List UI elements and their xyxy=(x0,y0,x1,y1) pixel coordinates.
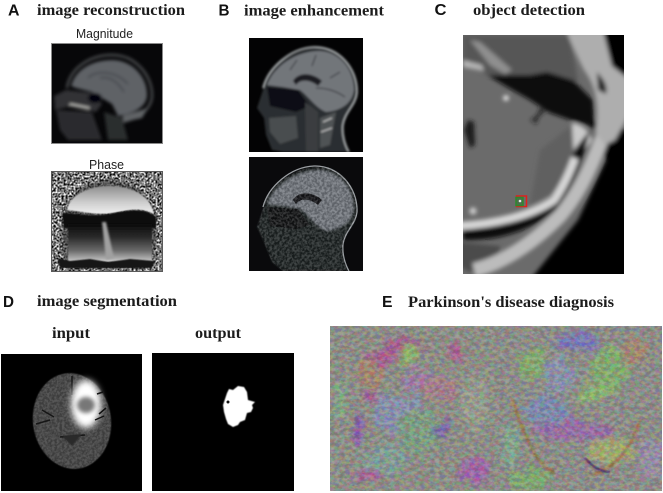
detection box: green xyxy=(516,198,523,206)
image: enhanced T1 MRI xyxy=(249,157,363,271)
heading: image enhancement: image enhancement xyxy=(244,2,385,20)
label: B: B xyxy=(218,2,230,20)
caption: Magnitude: Magnitude xyxy=(76,26,133,41)
detection box: red xyxy=(516,196,526,206)
label: E: E xyxy=(382,294,393,311)
caption: Phase: Phase xyxy=(89,157,124,172)
caption: output: output xyxy=(195,325,242,342)
panel: C object detection xyxy=(434,2,630,280)
image: saliency map right xyxy=(496,326,662,491)
label: C: C xyxy=(434,2,447,19)
caption: input: input xyxy=(52,325,91,342)
panel: B image enhancement xyxy=(218,2,385,271)
image: input brain scan xyxy=(1,354,142,491)
image: output segmentation mask xyxy=(152,353,294,491)
heading: image reconstruction: image reconstruction xyxy=(37,2,185,19)
image: saliency map left xyxy=(330,326,496,491)
label: D: D xyxy=(3,294,14,311)
panel: E Parkinson's disease diagnosis xyxy=(320,294,663,493)
detected spot xyxy=(519,200,521,202)
heading: object detection: object detection xyxy=(473,2,585,19)
label: A: A xyxy=(8,2,20,20)
image: brain scan with detection box xyxy=(463,35,624,274)
image: magnitude MRI xyxy=(51,43,163,144)
panel: D image segmentation xyxy=(1,293,294,491)
heading: Parkinson's disease diagnosis: Parkinson's disease diagnosis xyxy=(408,294,614,311)
image: original T1 MRI xyxy=(249,38,363,152)
image: phase MRI xyxy=(51,171,163,272)
panel: A image reconstruction xyxy=(8,2,185,272)
heading: image segmentation: image segmentation xyxy=(37,293,177,310)
